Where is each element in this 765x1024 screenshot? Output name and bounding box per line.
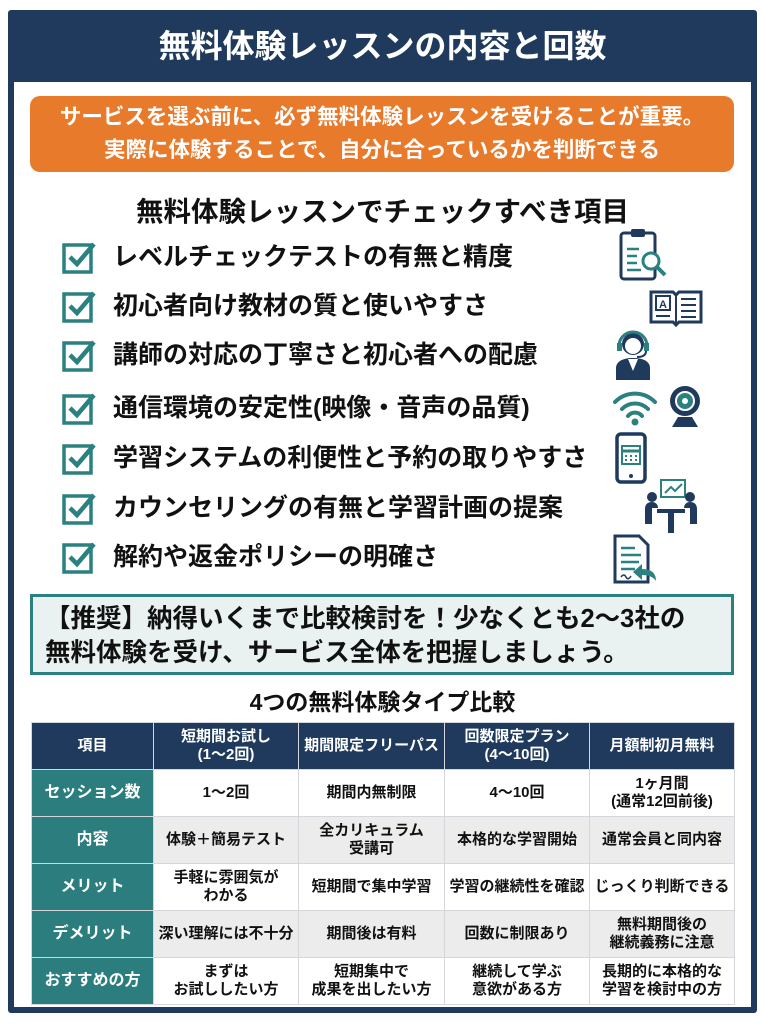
table title: 4つの無料体験タイプ比較 — [250, 689, 515, 715]
orange callout — [30, 96, 734, 172]
orange callout: サービスを選ぶ前に、必ず無料体験レッスンを受けることが重要。 — [60, 105, 704, 129]
icon: webcam — [670, 386, 700, 427]
comparison table: 回数限定プラン — [464, 728, 570, 745]
comparison table: 成果を出したい方 — [311, 981, 432, 998]
comparison table: わかる — [203, 887, 248, 904]
icon: phone calendar — [615, 432, 647, 484]
item 4: 通信環境の安定性(映像・音声の品質) — [113, 394, 530, 422]
icon: support person — [616, 330, 650, 380]
recommendation box: 【推奨】納得いくまで比較検討を！少なくとも2〜3社の — [45, 605, 685, 633]
comparison table: 学習を検討中の方 — [602, 981, 722, 998]
icon: wifi — [612, 392, 658, 426]
icon: book: A — [659, 299, 667, 311]
item 2: 初心者向け教材の質と使いやすさ — [113, 292, 488, 320]
comparison table: 手軽に雰囲気が — [173, 869, 278, 886]
comparison table: 受講可 — [349, 840, 394, 857]
comparison table: 継続義務に注意 — [609, 934, 714, 951]
comparison table: 4〜10回 — [489, 784, 545, 801]
comparison table: デメリット — [52, 925, 132, 942]
subheading: 無料体験レッスンでチェックすべき項目 — [136, 196, 629, 227]
icon: book — [650, 290, 702, 327]
title: 無料体験レッスンの内容と回数 — [158, 28, 606, 64]
comparison table: (4〜10回) — [484, 746, 550, 763]
icon: clipboard search — [620, 229, 666, 280]
comparison table: じっくり判断できる — [595, 878, 729, 895]
item 6: カウンセリングの有無と学習計画の提案 — [113, 494, 563, 522]
comparison table: おすすめの方 — [44, 972, 140, 989]
comparison table: 1〜2回 — [203, 784, 249, 801]
comparison table: 全カリキュラム — [319, 822, 424, 839]
comparison table: 短期間お試し — [181, 728, 271, 745]
recommendation box — [30, 594, 734, 675]
comparison table: 短期間で集中学習 — [311, 878, 432, 895]
comparison table: 学習の継続性を確認 — [449, 878, 584, 895]
comparison table: (1〜2回) — [198, 746, 254, 763]
comparison table: 長期的に本格的な — [602, 963, 722, 980]
item 1: レベルチェックテストの有無と精度 — [113, 243, 513, 271]
comparison table: 通常会員と同内容 — [602, 831, 722, 848]
item 7: 解約や返金ポリシーの明確さ — [113, 543, 438, 571]
comparison table: 無料期間後の — [617, 916, 707, 933]
comparison table: 期間内無制限 — [326, 784, 416, 801]
comparison table: 期間限定フリーパス — [304, 737, 439, 754]
comparison table: 1ヶ月間 — [635, 775, 689, 792]
comparison table: 回数に制限あり — [464, 925, 570, 942]
comparison table: セッション数 — [44, 784, 140, 801]
comparison table: 体験＋簡易テスト — [166, 831, 286, 848]
comparison table: まずは — [203, 963, 248, 980]
comparison table: 項目 — [77, 737, 108, 754]
comparison table: (通常12回前後) — [611, 793, 713, 810]
item 5: 学習システムの利便性と予約の取りやすさ — [113, 444, 587, 472]
comparison table: 意欲がある方 — [472, 981, 562, 998]
comparison table: 月額制初月無料 — [609, 737, 714, 754]
comparison table: メリット — [60, 878, 124, 895]
comparison table: 深い理解には不十分 — [158, 925, 294, 942]
comparison table: 期間後は有料 — [326, 925, 416, 942]
comparison table — [31, 722, 735, 1005]
comparison table: 内容 — [76, 831, 108, 848]
item 3: 講師の対応の丁寧さと初心者への配慮 — [113, 341, 538, 369]
comparison table: 継続して学ぶ — [472, 963, 562, 980]
icon: meeting — [645, 479, 697, 533]
recommendation box: 無料体験を受け、サービス全体を把握しましょう。 — [45, 639, 629, 667]
icon: document return — [614, 534, 656, 584]
comparison table: 本格的な学習開始 — [457, 831, 577, 848]
comparison table: 短期集中で — [334, 963, 409, 980]
comparison table: お試ししたい方 — [173, 981, 278, 998]
orange callout: 実際に体験することで、自分に合っているかを判断できる — [104, 138, 660, 162]
